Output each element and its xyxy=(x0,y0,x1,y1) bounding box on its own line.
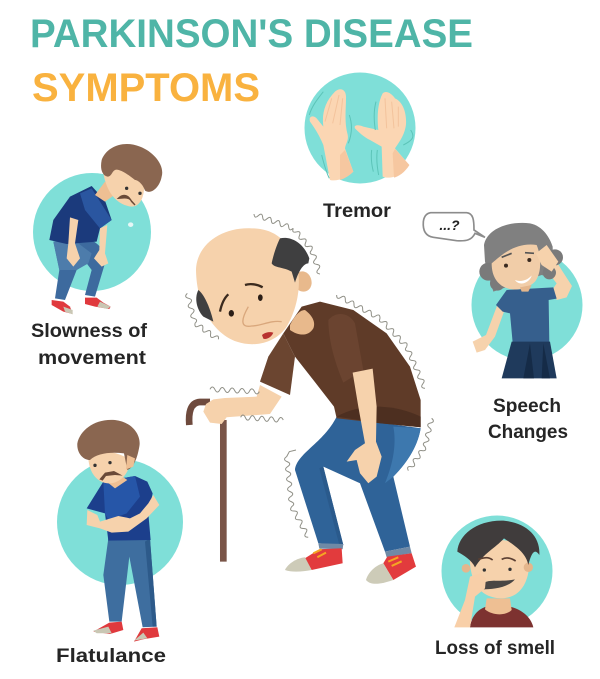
shoes xyxy=(305,548,343,570)
tremor line: front leg xyxy=(285,450,308,537)
label: speech changes: Speech xyxy=(493,396,561,417)
tremor line: back leg xyxy=(408,418,433,471)
icon: shaking hands xyxy=(309,89,413,180)
face xyxy=(220,284,263,312)
panel: speech changes xyxy=(423,213,582,443)
title: PARKINSON'S DISEASE xyxy=(30,12,473,56)
speech circle xyxy=(472,250,582,360)
right arm and hand xyxy=(347,369,382,483)
icon: cane xyxy=(189,402,210,425)
figure: man holding stomach xyxy=(77,420,159,642)
tremor line: above arm xyxy=(210,387,259,394)
neck xyxy=(290,310,314,335)
tremor circle xyxy=(304,72,416,184)
shirt xyxy=(283,302,421,427)
panel: elderly man with cane xyxy=(186,214,433,584)
speech bubble: ...? xyxy=(439,217,460,233)
title xyxy=(30,12,473,110)
speech bubble xyxy=(423,213,485,241)
tremor line: back xyxy=(337,295,425,388)
label: slowness of movement: Slowness of xyxy=(31,321,148,342)
panel: slowness of movement: movement xyxy=(38,348,147,369)
title: SYMPTOMS xyxy=(32,66,260,110)
figure: man pinching nose xyxy=(454,521,539,627)
panel: speech changes: Changes xyxy=(488,422,568,443)
figure: grey-haired woman xyxy=(473,223,572,378)
smell circle xyxy=(442,516,552,626)
left arm and hand xyxy=(203,385,282,424)
head xyxy=(196,228,299,344)
label: tremor: Tremor xyxy=(323,201,392,222)
figure: bent-over man xyxy=(49,144,162,314)
flatulance circle xyxy=(57,459,183,585)
panel: slowness of movement xyxy=(31,144,162,369)
tremor line: head front xyxy=(186,293,218,339)
label: loss of smell: Loss of smell xyxy=(435,638,555,659)
hair xyxy=(272,238,309,283)
tremor line: head back xyxy=(254,214,320,274)
slowness circle xyxy=(33,173,151,291)
panel: loss of smell xyxy=(435,516,555,659)
tremor line: below arm xyxy=(241,415,283,422)
jeans xyxy=(295,417,421,552)
panel: flatulance xyxy=(56,420,183,667)
ear xyxy=(297,271,312,292)
label: flatulance: Flatulance xyxy=(56,646,166,667)
panel: tremor xyxy=(304,72,416,222)
